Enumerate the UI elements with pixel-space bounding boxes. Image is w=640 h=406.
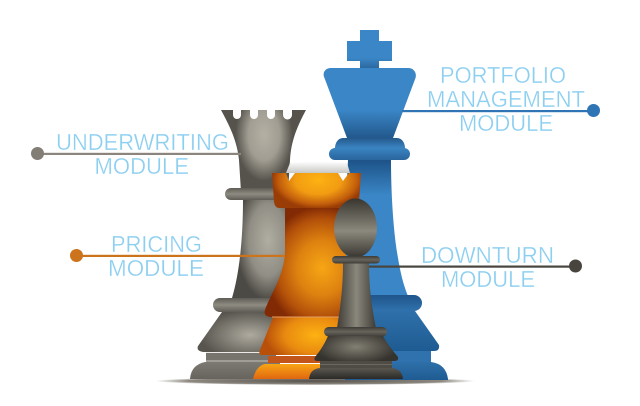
callout: downturn module	[369, 242, 582, 292]
callout: downturn module: DOWNTURN	[421, 242, 554, 268]
callout: portfolio management module	[402, 62, 600, 136]
icon: dark pawn	[309, 198, 403, 379]
callout: underwriting module	[31, 129, 241, 179]
callout: portfolio management module: MODULE	[459, 110, 553, 136]
icon: blue king	[324, 30, 448, 380]
callout: underwriting module: UNDERWRITING	[56, 129, 229, 155]
callout: downturn module: MODULE	[441, 266, 535, 292]
callout: pricing module: MODULE	[108, 255, 204, 281]
icon: gray rook	[190, 110, 306, 379]
callout: pricing module	[70, 231, 285, 281]
callout: underwriting module: MODULE	[94, 153, 189, 179]
ground shadow	[155, 377, 475, 385]
callout: portfolio management module: MANAGEMENT	[427, 86, 585, 112]
callout: portfolio management module: PORTFOLIO	[440, 62, 566, 88]
icon: orange rook	[253, 162, 361, 379]
callout: pricing module: PRICING	[111, 231, 202, 257]
